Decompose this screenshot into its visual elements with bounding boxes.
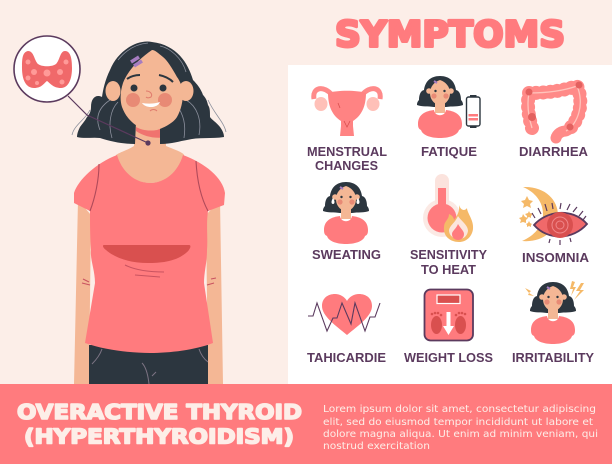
eyebrows <box>127 75 173 82</box>
icon: weight scale <box>424 290 473 340</box>
panel: symptoms <box>288 65 612 384</box>
banner body text: elit, sed do eiusmod tempor incididunt ut labore et <box>323 417 593 428</box>
label: menstrual changes: CHANGES <box>315 158 378 173</box>
icon: sweating woman <box>323 182 369 244</box>
icon: insomnia moon and eye <box>519 187 587 245</box>
label: insomnia: INSOMNIA <box>522 250 590 265</box>
icon: thyroid callout <box>14 36 80 102</box>
eyes <box>130 84 138 92</box>
ears <box>106 81 120 101</box>
label: menstrual changes <box>307 144 387 173</box>
hair clip <box>131 57 142 66</box>
icon: fatigue woman and battery <box>417 76 480 138</box>
label: tahicardie: TAHICARDIE <box>307 350 386 365</box>
banner body text: Lorem ipsum dolor sit amet, consectetur adipiscing <box>323 404 596 415</box>
label: sensitivity to heat <box>410 247 487 277</box>
banner <box>0 384 612 464</box>
woman figure <box>72 42 226 384</box>
icon: irritable woman with bolts <box>525 281 584 344</box>
label: fatique: FATIQUE <box>421 144 477 159</box>
label: sweating: SWEATING <box>312 247 381 262</box>
label: diarrhea: DIARRHEA <box>519 144 589 159</box>
label: sensitivity to heat: TO HEAT <box>421 262 476 277</box>
banner body text: dolore magna aliqua. Ut enim ad minim veniam, qui <box>323 429 598 440</box>
banner heading: (HYPERTHYROIDISM) <box>24 424 294 448</box>
cheeks <box>126 93 140 107</box>
shirt seams <box>90 161 208 211</box>
banner heading <box>17 400 302 448</box>
title: SYMPTOMS <box>335 14 565 56</box>
label: irritability: IRRITABILITY <box>512 350 594 365</box>
label: sensitivity to heat: SENSITIVITY <box>410 247 487 262</box>
icon: colon <box>526 82 582 138</box>
banner body text: nostrud exercitation <box>323 441 430 452</box>
shirt <box>74 155 225 353</box>
banner body text <box>323 404 598 452</box>
banner heading: OVERACTIVE THYROID <box>17 400 302 424</box>
hair <box>77 42 224 144</box>
icon: thermometer and flame <box>423 174 473 242</box>
icon: heart with ECG <box>308 294 380 335</box>
smile <box>142 102 160 107</box>
stomach red mark <box>103 245 190 263</box>
trousers <box>89 345 208 384</box>
icon: uterus <box>314 89 380 136</box>
pointer line <box>68 96 151 146</box>
wrinkles <box>82 265 216 285</box>
neck <box>116 120 184 183</box>
label: menstrual changes: MENSTRUAL <box>307 144 387 159</box>
face <box>121 50 183 130</box>
arms <box>74 200 223 384</box>
neck area swelling <box>136 125 166 138</box>
lip <box>150 110 157 111</box>
nose <box>146 91 152 98</box>
label: weight loss: WEIGHT LOSS <box>404 350 493 365</box>
